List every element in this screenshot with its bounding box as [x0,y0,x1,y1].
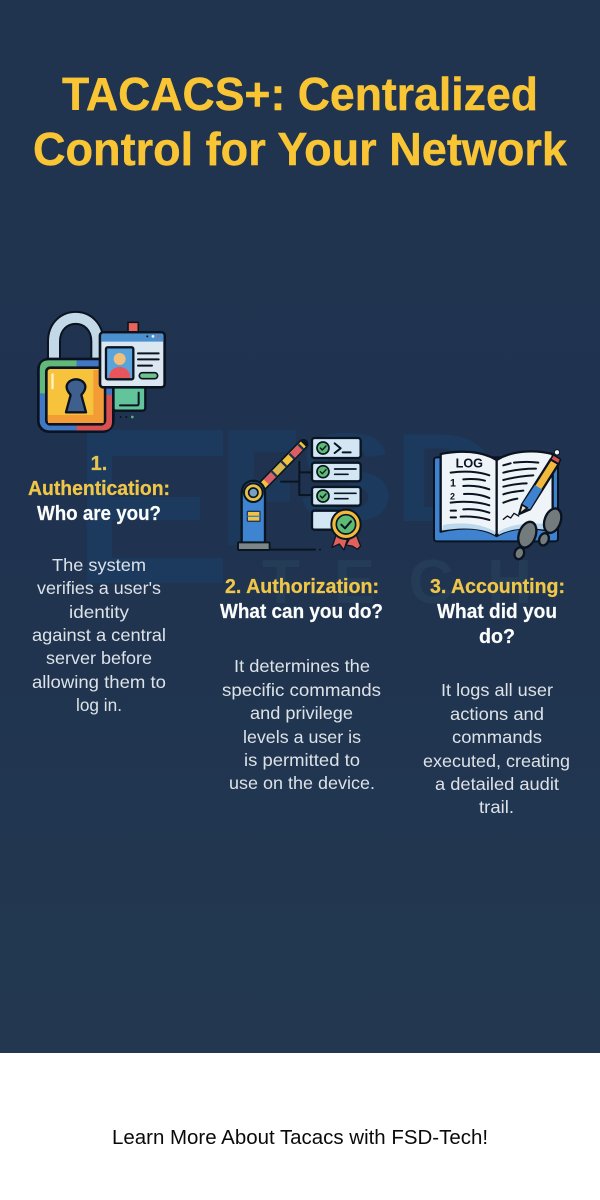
footer text: Learn More About Tacacs with FSD-Tech! [112,1127,488,1149]
text: Accounting description [423,680,570,817]
title [33,68,567,175]
text: Accounting description: trail. [479,797,514,817]
watermark: FSD Tech logo [87,407,532,617]
watermark: FSD Tech logo: TECH [262,548,532,617]
text: Authorization description: use on the device. [229,773,375,793]
text: Authentication description: log in. [76,695,122,715]
text: Authorization description: is permitted to [244,750,360,770]
icon part: barrier arm [257,444,303,492]
heading: Authorization [220,576,383,623]
text: Authorization description [222,656,381,793]
icon: open log book with pen and footprints [434,450,565,561]
column 2: Authorization [220,576,383,793]
heading: Authentication: Who are you? [37,503,161,525]
text: Authentication description: identity [69,602,129,622]
text: Accounting description: commands [452,727,542,747]
icon part: award rosette [331,510,361,550]
icon: open log book with pen and footprints: 2 [450,491,455,501]
heading: Authentication: 1. [91,453,107,475]
text: Accounting description: actions and [450,704,544,724]
watermark: FSD Tech logo: SD [298,407,498,548]
heading: Authentication [28,453,170,525]
icon part: pen [519,450,561,514]
text: Authentication description: allowing them to [32,672,166,692]
text: Authentication description: server before [46,648,152,668]
title: Control for Your Network [33,123,567,175]
text: Authentication description: The system [52,555,146,575]
heading: Accounting: What did you [437,601,557,623]
icon part: footprints [513,506,565,561]
heading: Authorization: 2. Authorization: [225,576,379,598]
column 3: Accounting [423,576,570,817]
icon: open log book with pen and footprints: 1 [450,478,456,490]
icon: padlock with ID badge [38,318,165,432]
heading: Accounting: do? [479,626,515,648]
text: Authentication description [32,555,166,715]
icon: barrier gate with checklist and badge [238,438,361,551]
heading: Authorization: What can you do? [220,601,383,623]
heading: Accounting [430,576,565,648]
text: Authorization description: It determines the [234,656,370,676]
text: Accounting description: It logs all user [441,680,553,700]
text: Accounting description: a detailed audit [435,774,559,794]
icon part: checklist rows [312,438,361,530]
heading: Authentication: Authentication: [28,478,170,500]
text: Authorization description: and privilege [250,703,353,723]
text: Authorization description: levels a user is [243,727,361,747]
icon: open log book with pen and footprints: LOG [456,456,483,470]
title: TACACS+: Centralized [62,68,538,120]
text: Authentication description: verifies a user's [37,578,161,598]
heading: Accounting: 3. Accounting: [430,576,565,598]
icon part: green card behind badge [113,380,145,411]
text: Authorization description: specific commands [222,680,381,700]
text: Accounting description: executed, creating [423,751,570,771]
text: Authentication description: against a central [32,625,166,645]
column 1: Authentication [28,453,170,715]
